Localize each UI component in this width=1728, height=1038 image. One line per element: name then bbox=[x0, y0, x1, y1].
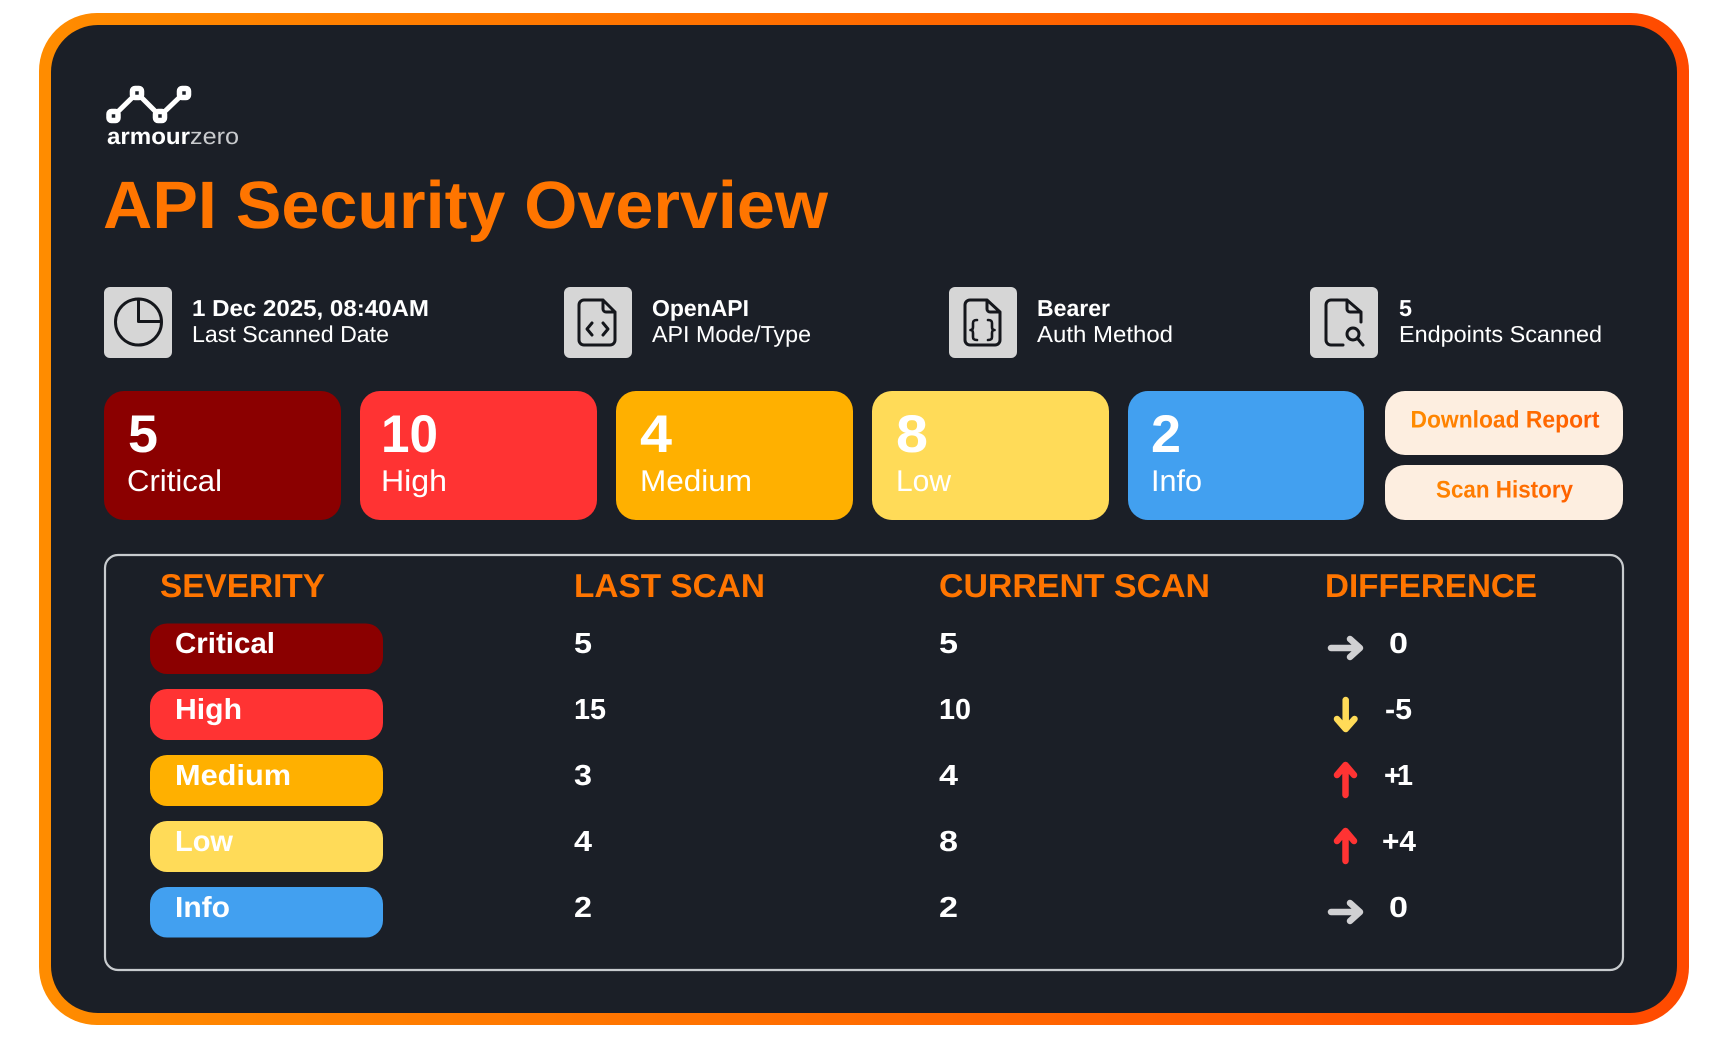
row: high bbox=[150, 689, 1412, 740]
row: critical: 5 bbox=[939, 628, 958, 660]
stat card: low: Low bbox=[896, 465, 951, 498]
icon: code file bbox=[564, 287, 632, 358]
stat card: high: 10 bbox=[381, 405, 438, 464]
stat card: medium bbox=[616, 391, 853, 520]
row: high: High bbox=[175, 694, 242, 726]
button: scan history bbox=[1385, 465, 1623, 520]
stat card: low bbox=[872, 391, 1109, 520]
logo: armourzero: zero bbox=[190, 123, 239, 149]
stat card: high bbox=[360, 391, 597, 520]
row: info: 2 bbox=[574, 892, 592, 924]
stat card: critical: Critical bbox=[127, 465, 222, 498]
logo: armourzero bbox=[107, 88, 239, 149]
meta item: endpoints scanned: Endpoints Scanned bbox=[1399, 321, 1602, 347]
button: scan history: Scan History bbox=[1436, 476, 1574, 504]
row: critical: Critical bbox=[175, 628, 275, 660]
stat card: low: 8 bbox=[896, 405, 928, 464]
stat card: info: 2 bbox=[1151, 405, 1181, 464]
row: medium bbox=[150, 755, 1413, 806]
arrow: neutral bbox=[1331, 903, 1360, 921]
row: low: +4 bbox=[1382, 826, 1416, 858]
stat card: info bbox=[1128, 391, 1364, 520]
meta item: auth method: Auth Method bbox=[1037, 321, 1173, 347]
row: medium: 3 bbox=[574, 760, 592, 792]
meta item: API mode: OpenAPI bbox=[652, 295, 749, 321]
row: high: -5 bbox=[1385, 694, 1412, 726]
meta item: endpoints scanned bbox=[1310, 287, 1602, 358]
stat card: critical bbox=[104, 391, 341, 520]
row: info bbox=[150, 887, 1408, 938]
table header: LAST SCAN bbox=[574, 567, 765, 604]
row: low: 4 bbox=[574, 826, 592, 858]
stat card: info: Info bbox=[1151, 465, 1202, 498]
arrow: increase bbox=[1337, 765, 1354, 795]
button: download report bbox=[1385, 391, 1623, 455]
row: low: 8 bbox=[939, 826, 958, 858]
meta item: API mode bbox=[564, 287, 811, 358]
row: info: Info bbox=[175, 892, 230, 924]
row: critical bbox=[150, 624, 1408, 674]
row: info: 2 bbox=[939, 892, 958, 924]
meta item: auth method: Bearer bbox=[1037, 295, 1110, 321]
table header bbox=[160, 567, 1537, 604]
stat card: high: High bbox=[381, 465, 447, 498]
arrow: decrease bbox=[1337, 700, 1354, 729]
row: medium: 4 bbox=[939, 760, 958, 792]
row: critical: 5 bbox=[574, 628, 592, 660]
button: download report: Download Report bbox=[1410, 406, 1600, 434]
row: info: 0 bbox=[1389, 892, 1408, 924]
stat card: medium: Medium bbox=[640, 465, 752, 498]
arrow: increase bbox=[1337, 831, 1354, 861]
icon: braces file bbox=[949, 287, 1017, 358]
meta item: last scanned date: 1 Dec 2025, 08:40AM bbox=[192, 295, 429, 321]
meta item: auth method bbox=[949, 287, 1173, 358]
table header: DIFFERENCE bbox=[1325, 567, 1537, 604]
meta item: endpoints scanned: 5 bbox=[1399, 295, 1412, 321]
table header: CURRENT SCAN bbox=[939, 567, 1210, 604]
stat card: medium: 4 bbox=[640, 405, 673, 464]
row: low: Low bbox=[175, 826, 233, 858]
stat card: critical: 5 bbox=[128, 405, 158, 464]
logo: armourzero: armour bbox=[107, 123, 190, 149]
panel: severity comparison table bbox=[105, 555, 1623, 970]
icon: file search bbox=[1310, 287, 1378, 358]
row: high: 15 bbox=[574, 694, 606, 726]
meta item: last scanned date bbox=[104, 287, 429, 358]
meta item: last scanned date: Last Scanned Date bbox=[192, 321, 389, 347]
row: low bbox=[150, 821, 1416, 872]
arrow: neutral bbox=[1331, 639, 1360, 657]
row: medium: +1 bbox=[1384, 760, 1413, 792]
icon: clock bbox=[104, 287, 172, 358]
table header: SEVERITY bbox=[160, 567, 325, 604]
title: API Security Overview bbox=[103, 168, 829, 243]
row: high: 10 bbox=[939, 694, 971, 726]
row: critical: 0 bbox=[1389, 628, 1408, 660]
meta item: API mode: API Mode/Type bbox=[652, 321, 811, 347]
row: medium: Medium bbox=[175, 760, 291, 792]
